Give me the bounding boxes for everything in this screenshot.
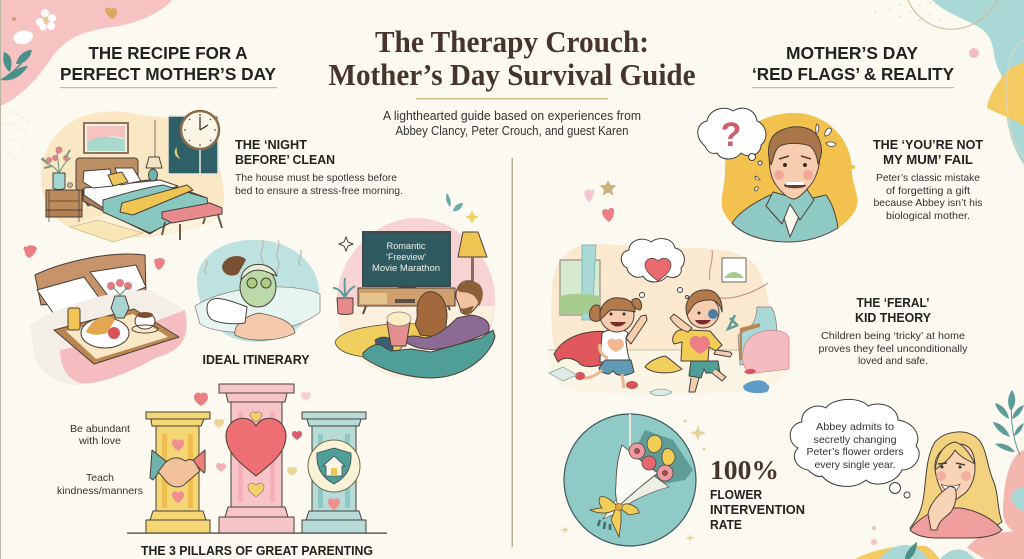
text: you're not my mum fail: because Abbey isn’t his (874, 197, 982, 209)
heading: recipe for a perfect mother's day (60, 43, 277, 88)
icon: star and hearts (584, 180, 616, 222)
text: the night before clean: BEFORE’ CLEAN (235, 153, 335, 167)
text: you're not my mum fail: biological mother. (886, 210, 970, 222)
subtitle: A lighthearted guide based on experiences from (383, 109, 641, 123)
icon: handshake (150, 450, 205, 487)
icon: hearts near breakfast (24, 245, 165, 270)
boy in yellow shirt (670, 290, 732, 392)
girl in red cape (554, 298, 647, 389)
heading: recipe for a perfect mother's day: THE RECIPE FOR A (88, 43, 248, 63)
stat: 100% flower intervention rate (710, 455, 805, 532)
heading: recipe for a perfect mother's day: PERFECT MOTHER’S DAY (60, 64, 276, 84)
heading: mother's day red flags and reality: ‘RED FLAGS’ & REALITY (752, 64, 954, 84)
icon: wall clock (181, 111, 219, 149)
text: the night before clean: bed to ensure a stress-free morning. (235, 185, 403, 197)
text: the night before clean: THE ‘NIGHT (235, 138, 307, 152)
tv with romantic freeview movie marathon (363, 232, 450, 286)
title (328, 24, 696, 100)
stat: 100% flower intervention rate: INTERVENTION (710, 503, 805, 517)
thought bubble with heart (621, 239, 688, 298)
chart: three pillars of great parenting (127, 384, 387, 534)
decoration: bottom-right floral corner (855, 390, 1024, 559)
callout: abbey speech bubble (790, 399, 919, 498)
icon: gold sparkles (560, 420, 706, 542)
text: you're not my mum fail: of forgetting a gift (886, 185, 970, 197)
callout: abbey speech bubble: secretly changing (814, 434, 897, 446)
icon: shield with house (308, 440, 360, 492)
illustration: laughing Abbey with hand over mouth (910, 432, 1002, 538)
text: the feral kid theory: loved and safe. (858, 355, 928, 367)
chart: 100 percent pie with bouquet (564, 414, 696, 546)
pillar: teal (302, 412, 366, 533)
text: the feral kid theory: THE ‘FERAL’ (856, 296, 930, 310)
text: you're not my mum fail: Peter’s classic mistake (876, 172, 980, 184)
label: be abundant with love: with love (78, 435, 121, 447)
heading: mother's day red flags and reality (752, 43, 954, 88)
callout: abbey speech bubble: every single year. (814, 459, 896, 471)
label: teach kindness/manners: kindness/manners (57, 485, 143, 497)
stat: 100% flower intervention rate: 100% (710, 455, 779, 485)
thought bubble with question mark (698, 108, 766, 165)
subtitle: Abbey Clancy, Peter Crouch, and guest Karen (396, 124, 629, 138)
title: The Therapy Crouch: (375, 24, 649, 59)
label: teach kindness/manners: Teach (86, 472, 114, 484)
pillar: pink (219, 384, 294, 533)
illustration: feral kids in messy room (548, 239, 789, 396)
illustration: couple's movie marathon (333, 218, 495, 379)
illustration: spa face mask (195, 240, 320, 342)
label: ideal itinerary: IDEAL ITINERARY (202, 353, 310, 367)
center divider (512, 158, 513, 547)
illustration: worried man with thought bubble (698, 108, 857, 242)
icon: sparkles and drops above movie scene (339, 193, 479, 251)
label: be abundant with love (70, 423, 130, 447)
text: you're not my mum fail (873, 138, 983, 222)
label: be abundant with love: Be abundant (70, 423, 130, 435)
heading: mother's day red flags and reality: MOTHER’S DAY (786, 43, 918, 63)
illustration: tidy bedroom at night (41, 111, 224, 242)
thought bubble with question mark: ? (721, 116, 741, 154)
tv with romantic freeview movie marathon: ‘Freeview’ (386, 252, 426, 262)
icon: small pillar hearts (172, 392, 340, 510)
text: you're not my mum fail: THE ‘YOU’RE NOT (873, 138, 983, 152)
label: teach kindness/manners (57, 472, 143, 497)
label: the 3 pillars of great parenting: THE 3 PILLARS OF GREAT PARENTING (141, 544, 373, 558)
tv with romantic freeview movie marathon: Romantic (386, 241, 426, 251)
subtitle (383, 109, 641, 138)
text: the feral kid theory: Children being ‘tricky’ at home (821, 330, 965, 342)
text: you're not my mum fail: MY MUM’ FAIL (883, 153, 973, 167)
callout: abbey speech bubble: Abbey admits to (816, 421, 894, 433)
decoration: top-left pink corner (1, 0, 172, 162)
text: the feral kid theory: proves they feel unconditionally (818, 343, 968, 355)
text: the feral kid theory (818, 296, 968, 367)
pillar: yellow (146, 412, 210, 533)
tv with romantic freeview movie marathon: Movie Marathon (372, 263, 440, 273)
stat: 100% flower intervention rate: FLOWER (710, 488, 762, 502)
icon: large red heart (226, 418, 286, 476)
text: the night before clean (235, 138, 403, 197)
text: the feral kid theory: KID THEORY (855, 311, 932, 325)
illustration: breakfast in bed (30, 254, 187, 385)
title: Mother’s Day Survival Guide (328, 57, 696, 92)
decoration: top-right teal and yellow shapes (874, 0, 1024, 165)
callout: abbey speech bubble: Peter’s flower orders (806, 446, 904, 458)
text: the night before clean: The house must be spotless before (235, 172, 397, 184)
stat: 100% flower intervention rate: RATE (710, 518, 742, 532)
